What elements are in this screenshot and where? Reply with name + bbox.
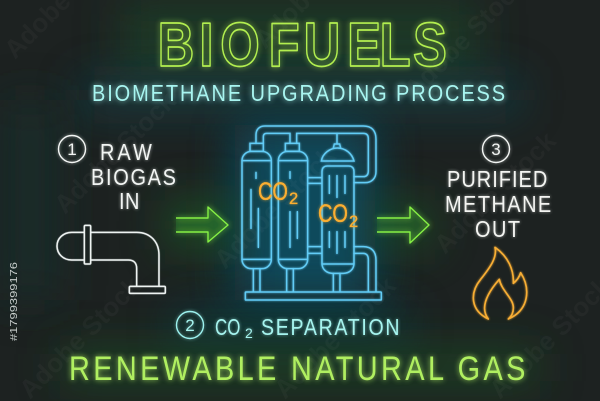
separator vessels <box>242 126 381 300</box>
label: purified methane out: METHANE <box>445 190 551 217</box>
step 1: raw biogas in <box>58 136 176 214</box>
CO2 label left: CO <box>258 178 288 206</box>
icon: pipe <box>57 225 165 293</box>
label: purified methane out <box>445 165 551 242</box>
arrow: methane out of separator <box>377 207 429 243</box>
watermark: Adobe Stock <box>428 125 562 259</box>
label: raw biogas in: BIOGAS <box>91 163 176 190</box>
step number 2 <box>176 312 204 338</box>
step 3: purified methane out <box>445 136 551 242</box>
step number 1: 1 <box>67 140 77 159</box>
CO2 label right: 2 <box>349 213 358 231</box>
CO2 label left <box>258 178 298 208</box>
base plate <box>245 292 381 300</box>
label: raw biogas in: RAW <box>100 138 152 165</box>
title: BIOFUELS <box>158 11 447 80</box>
arrow: biogas into separator <box>176 207 228 242</box>
step number 2: 2 <box>185 316 195 335</box>
stock id: #1799399176 <box>8 262 20 341</box>
step 2: CO2 separation <box>176 312 400 341</box>
vessel 3 <box>321 133 354 292</box>
CO2 label right: CO <box>318 200 348 228</box>
watermark: Adobe Stock <box>268 270 402 401</box>
label: CO2 separation: CO <box>215 314 240 341</box>
CO2 label left: 2 <box>289 190 298 208</box>
label: purified methane out: OUT <box>475 215 520 242</box>
footer: renewable natural gas: RENEWABLE NATURAL GAS <box>69 349 525 388</box>
label: CO2 separation: 2 <box>245 325 253 341</box>
label: raw biogas in <box>91 138 176 214</box>
vessel 2 <box>278 143 308 292</box>
CO2 label right <box>318 200 358 231</box>
watermark: Adobe Stock <box>208 140 342 274</box>
subtitle: BIOMETHANE UPGRADING PROCESS <box>92 79 505 106</box>
label: purified methane out: PURIFIED <box>447 165 547 192</box>
watermark: Adobe Stock <box>48 85 182 219</box>
step number 3: 3 <box>491 140 501 159</box>
watermark: Adobe Stock <box>13 270 147 401</box>
label: raw biogas in: IN <box>119 187 139 214</box>
top pipes <box>256 126 376 183</box>
label: CO2 separation: SEPARATION <box>261 315 400 340</box>
icon: flame <box>473 247 527 319</box>
vessel 1 <box>242 143 271 292</box>
bottom pipes <box>308 247 376 292</box>
